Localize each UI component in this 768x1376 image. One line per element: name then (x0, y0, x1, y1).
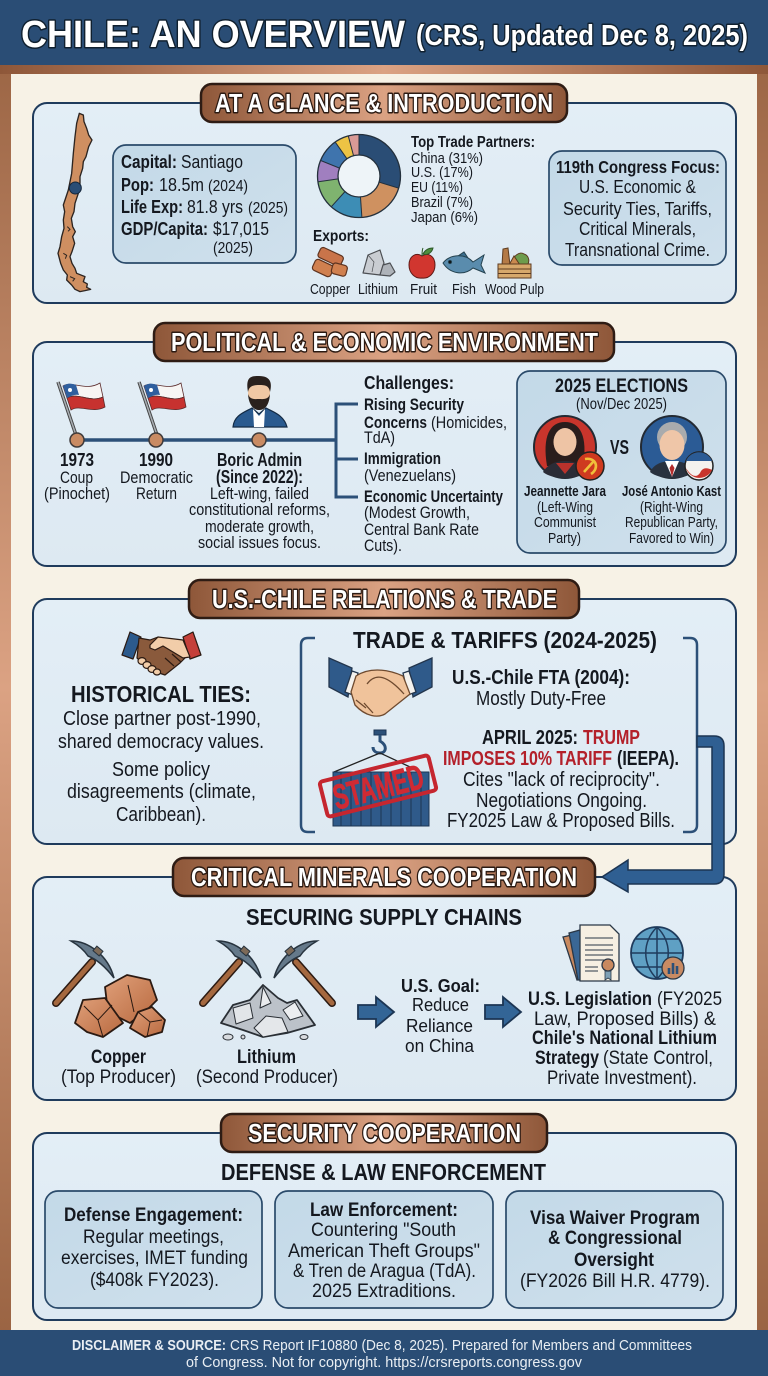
text: U.S. goal (401, 976, 480, 1056)
heading: critical minerals: CRITICAL MINERALS COOPERATION (191, 862, 577, 892)
trade partners list: Brazil (7%) (411, 194, 473, 211)
trade partners list: Top Trade Partners: (411, 134, 535, 151)
candidate labels: (Right-Wing (640, 499, 703, 516)
labels: copper and lithium: (Top Producer) (61, 1067, 176, 1088)
challenges list: Central Bank Rate (364, 521, 479, 539)
key facts box: (2024) (208, 178, 248, 195)
exports row: Copper (310, 281, 350, 298)
text: historical ties (58, 681, 264, 826)
portrait: Jose Antonio Kast (641, 416, 713, 480)
candidate labels: Republican Party, (625, 514, 718, 531)
callout: 119th Congress focus: Security Ties, Tariffs, (563, 199, 712, 219)
text: historical ties: shared democracy values. (58, 731, 264, 753)
candidate labels: Favored to Win) (629, 530, 714, 547)
text: historical ties: Some policy (112, 759, 210, 781)
box: defense engagement: Defense Engagement: (64, 1205, 243, 1226)
exports row: Wood Pulp (485, 281, 544, 298)
panel: U.S.-Chile relations and trade (33, 580, 736, 844)
icon: President Boric (233, 376, 287, 427)
labels: copper and lithium: (Second Producer) (196, 1067, 338, 1088)
challenges list: (Venezuelans) (364, 467, 456, 485)
portrait: Jeannette Jara (534, 416, 604, 480)
icon: FTA handshake (329, 658, 432, 716)
icon: apple (409, 248, 435, 278)
timeline label: Boric: moderate growth, (205, 518, 314, 536)
icon: wood pulp crate (498, 248, 531, 278)
text: legislation: Law, Proposed Bills) & (534, 1009, 716, 1030)
box: visa waiver: Visa Waiver Program (530, 1208, 700, 1229)
callout: 119th Congress focus: 119th Congress Focus: (556, 157, 720, 177)
text: legislation: U.S. Legislation (528, 989, 652, 1010)
arrow: goal to legislation (485, 997, 521, 1027)
labels: copper and lithium: Copper (91, 1047, 147, 1068)
heading: at a glance (201, 84, 567, 122)
trade partners list: Japan (6%) (411, 209, 478, 226)
timeline label: 1990: Return (136, 484, 177, 503)
text: legislation: Strategy (535, 1048, 599, 1069)
icon: fish (443, 252, 485, 273)
labels: copper and lithium (61, 1047, 338, 1088)
text: tariff details: APRIL 2025: (482, 727, 578, 749)
text: tariff details: IMPOSES 10% TARIFF (443, 748, 612, 770)
callout: 119th Congress focus: Critical Minerals, (579, 219, 696, 239)
text: tariff details: FY2025 Law & Proposed Bills. (447, 810, 675, 832)
candidate labels: (Left-Wing (537, 499, 593, 516)
timeline label: 1973: (Pinochet) (44, 484, 110, 503)
challenges list: (Modest Growth, (364, 504, 470, 522)
trade partners list (411, 134, 535, 226)
title bar: CHILE: AN OVERVIEW (21, 14, 405, 56)
box: law enforcement: Countering "South (311, 1220, 456, 1241)
footer disclaimer: DISCLAIMER & SOURCE: (72, 1338, 226, 1354)
versus: VS (610, 437, 629, 459)
challenges list: Cuts). (364, 537, 402, 555)
box: defense engagement: ($408k FY2023). (90, 1270, 219, 1291)
icon: documents and globe (563, 925, 684, 981)
arrow: minerals to goal (358, 997, 394, 1027)
callout: 119th Congress focus (549, 151, 726, 265)
text: FTA: U.S.-Chile FTA (2004): (452, 667, 630, 689)
text: tariff details: Cites "lack of reciprocity". (463, 769, 660, 791)
icon: stamped container (319, 730, 437, 826)
key facts box: Santiago (181, 152, 243, 172)
challenges list: Rising Security (364, 396, 465, 414)
heading: at a glance: AT A GLANCE & INTRODUCTION (215, 88, 553, 118)
key facts box: (2025) (213, 240, 253, 257)
icon: flag 1973 (58, 382, 105, 438)
text: legislation: (FY2025 (657, 989, 722, 1010)
footer disclaimer (0, 1330, 768, 1376)
challenges list: TdA) (364, 429, 395, 447)
candidate labels: Party) (548, 530, 581, 547)
timeline label: 1990: 1990 (139, 450, 173, 470)
text: legislation: Private Investment). (547, 1068, 697, 1089)
box: visa waiver: & Congressional (548, 1228, 682, 1249)
timeline (44, 376, 336, 552)
exports row: Fruit (410, 281, 438, 298)
box: defense engagement: exercises, IMET funding (61, 1248, 248, 1269)
box: defense engagement (45, 1191, 262, 1308)
footer disclaimer: of Congress. Not for copyright. https://crsreports.congress.gov (186, 1355, 583, 1371)
trade partners list: EU (11%) (411, 179, 463, 196)
heading: critical minerals (173, 858, 595, 896)
text: U.S. goal: U.S. Goal: (401, 976, 480, 996)
timeline label: 1990 (120, 450, 193, 503)
icon: lithium picks and rock (203, 941, 332, 1040)
heading: security cooperation (221, 1114, 547, 1152)
timeline label: 1990: Democratic (120, 468, 193, 487)
text: tariff details: (IEEPA). (617, 748, 679, 770)
challenges list: (Homicides, (431, 414, 507, 432)
key facts box: (2025) (248, 200, 288, 217)
challenges list (364, 373, 507, 555)
icon: lithium rock (363, 250, 395, 276)
heading: trade and tariffs: TRADE & TARIFFS (2024-2025) (353, 627, 657, 653)
box: law enforcement (275, 1191, 493, 1308)
timeline label: Boric: (Since 2022): (216, 467, 303, 487)
icon: copper bars (311, 246, 348, 278)
box: visa waiver (506, 1191, 723, 1308)
timeline label: Boric: Boric Admin (217, 450, 302, 470)
title bar (0, 0, 768, 65)
heading: political and economic (154, 323, 614, 361)
timeline label: 1973: 1973 (60, 450, 94, 470)
challenges list: Concerns (364, 414, 427, 432)
text: tariff details (443, 727, 679, 832)
candidate labels: Jeannette Jara (524, 483, 607, 500)
subheading: defense and law enforcement: DEFENSE & LAW ENFORCEMENT (221, 1159, 546, 1185)
text: U.S. goal: on China (405, 1035, 475, 1056)
box: law enforcement: & Tren de Aragua (TdA). (293, 1261, 476, 1282)
challenges list: Economic Uncertainty (364, 488, 504, 506)
trade bracket (301, 638, 697, 832)
challenges bracket (336, 404, 358, 497)
box: visa waiver: Oversight (574, 1250, 655, 1271)
labels: copper and lithium: Lithium (237, 1047, 296, 1068)
text: tariff details: Negotiations Ongoing. (476, 790, 647, 812)
text: legislation: (State Control, (603, 1048, 713, 1069)
text: U.S. goal: Reliance (406, 1015, 473, 1036)
timeline label: Boric (189, 450, 330, 552)
key facts box: 81.8 yrs (187, 197, 243, 217)
panel: 2025 elections: 2025 ELECTIONS (555, 376, 688, 397)
stamp: STAMED (329, 757, 428, 818)
subheading: supply chains: SECURING SUPPLY CHAINS (246, 904, 522, 930)
text: U.S. goal: Reduce (412, 994, 469, 1015)
box: law enforcement: Law Enforcement: (310, 1200, 458, 1221)
key facts box: $17,015 (213, 219, 269, 239)
timeline label: Boric: social issues focus. (198, 534, 321, 552)
key facts box: 18.5m (159, 175, 204, 195)
panel: 2025 elections: (Nov/Dec 2025) (576, 396, 667, 413)
callout: 119th Congress focus: U.S. Economic & (579, 177, 696, 197)
icon: copper pick and ore (56, 941, 165, 1037)
key facts box: Pop: (121, 175, 154, 195)
heading: relations and trade: U.S.-CHILE RELATIONS & TRADE (212, 584, 557, 614)
icon: flag 1990 (139, 382, 186, 438)
text: historical ties: Close partner post-1990, (63, 708, 261, 730)
key facts box (113, 145, 296, 263)
text: FTA: Mostly Duty-Free (476, 688, 606, 710)
text: tariff details: TRUMP (583, 727, 640, 749)
text: historical ties: Caribbean). (116, 804, 206, 826)
icon: historical handshake (122, 632, 201, 675)
panel: 2025 elections (517, 371, 726, 553)
timeline label: Boric: Left-wing, failed (210, 485, 309, 503)
heading: security cooperation: SECURITY COOPERATION (248, 1118, 521, 1148)
panel: at a glance (33, 84, 736, 303)
exports row: Fish (452, 281, 476, 298)
text: legislation: Chile's National Lithium (532, 1028, 717, 1049)
text: FTA (452, 667, 630, 710)
key facts box: Capital: (121, 152, 177, 172)
heading: relations and trade (189, 580, 579, 618)
candidate labels (524, 483, 721, 547)
callout: 119th Congress focus: Transnational Crime. (565, 240, 710, 260)
key facts box: Life Exp: (121, 197, 183, 217)
box: law enforcement: 2025 Extraditions. (312, 1281, 456, 1302)
box: visa waiver: (FY2026 Bill H.R. 4779). (520, 1271, 710, 1292)
text: legislation (528, 989, 722, 1089)
exports row (310, 228, 544, 298)
panel: political and economic environment (33, 323, 736, 566)
text: historical ties: disagreements (climate, (67, 781, 256, 803)
challenges list: Challenges: (364, 373, 454, 393)
candidate labels: Communist (534, 514, 597, 531)
box: defense engagement: Regular meetings, (83, 1227, 224, 1248)
box: law enforcement: American Theft Groups" (288, 1241, 480, 1262)
exports row: Lithium (358, 281, 398, 298)
timeline label: 1973 (44, 450, 110, 503)
footer disclaimer: CRS Report IF10880 (Dec 8, 2025). Prepared for Members and Committees (230, 1338, 692, 1354)
challenges list: Immigration (364, 450, 441, 468)
icon: map of Chile (58, 113, 92, 292)
trade partners list: China (31%) (411, 150, 483, 167)
key facts box: GDP/Capita: (121, 219, 208, 239)
exports row: Exports: (313, 228, 369, 245)
text: historical ties: HISTORICAL TIES: (71, 681, 251, 707)
heading: political and economic: POLITICAL & ECONOMIC ENVIRONMENT (171, 327, 598, 357)
candidate labels: José Antonio Kast (622, 483, 721, 500)
arrow: trade to critical minerals (602, 736, 724, 892)
panel: critical minerals (33, 858, 736, 1100)
timeline label: Boric: constitutional reforms, (189, 501, 330, 519)
panel: security cooperation (33, 1114, 736, 1320)
donut chart: top trade partners (318, 134, 400, 218)
timeline label: 1973: Coup (60, 468, 93, 487)
trade partners list: U.S. (17%) (411, 164, 473, 181)
